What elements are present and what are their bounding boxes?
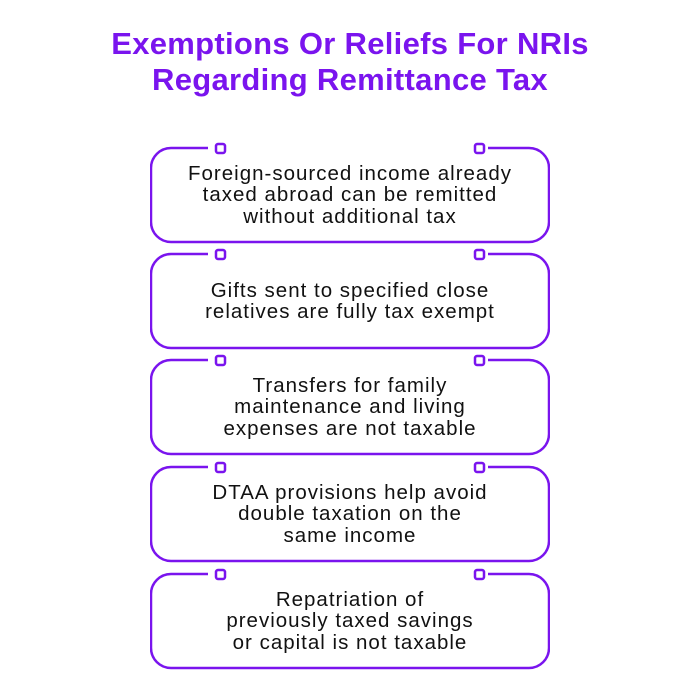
- card 1: without additional tax: [243, 205, 457, 228]
- card 1: taxed abroad can be remitted: [203, 183, 497, 206]
- card 3: expenses are not taxable: [223, 417, 477, 440]
- card 5: previously taxed savings: [226, 609, 474, 632]
- card 5: [150, 568, 550, 670]
- card 5: or capital is not taxable: [233, 631, 467, 654]
- card 4: DTAA provisions help avoid: [212, 481, 488, 504]
- card 3: Transfers for family: [253, 374, 447, 397]
- card 3: [150, 354, 550, 456]
- card 4: same income: [284, 524, 416, 547]
- card 4: double taxation on the: [238, 502, 462, 525]
- card 1: [150, 142, 550, 244]
- card 1: Foreign-sourced income already: [188, 162, 512, 185]
- card 5: Repatriation of: [276, 588, 424, 611]
- title: Regarding Remittance Tax: [152, 62, 548, 97]
- card 4: [150, 462, 550, 562]
- card 2: relatives are fully tax exempt: [205, 300, 495, 323]
- card 2: Gifts sent to specified close: [211, 278, 489, 302]
- card 2: [150, 248, 550, 350]
- card 3: maintenance and living: [234, 395, 466, 418]
- title: Exemptions Or Reliefs For NRIs: [111, 26, 589, 61]
- title: [111, 26, 589, 97]
